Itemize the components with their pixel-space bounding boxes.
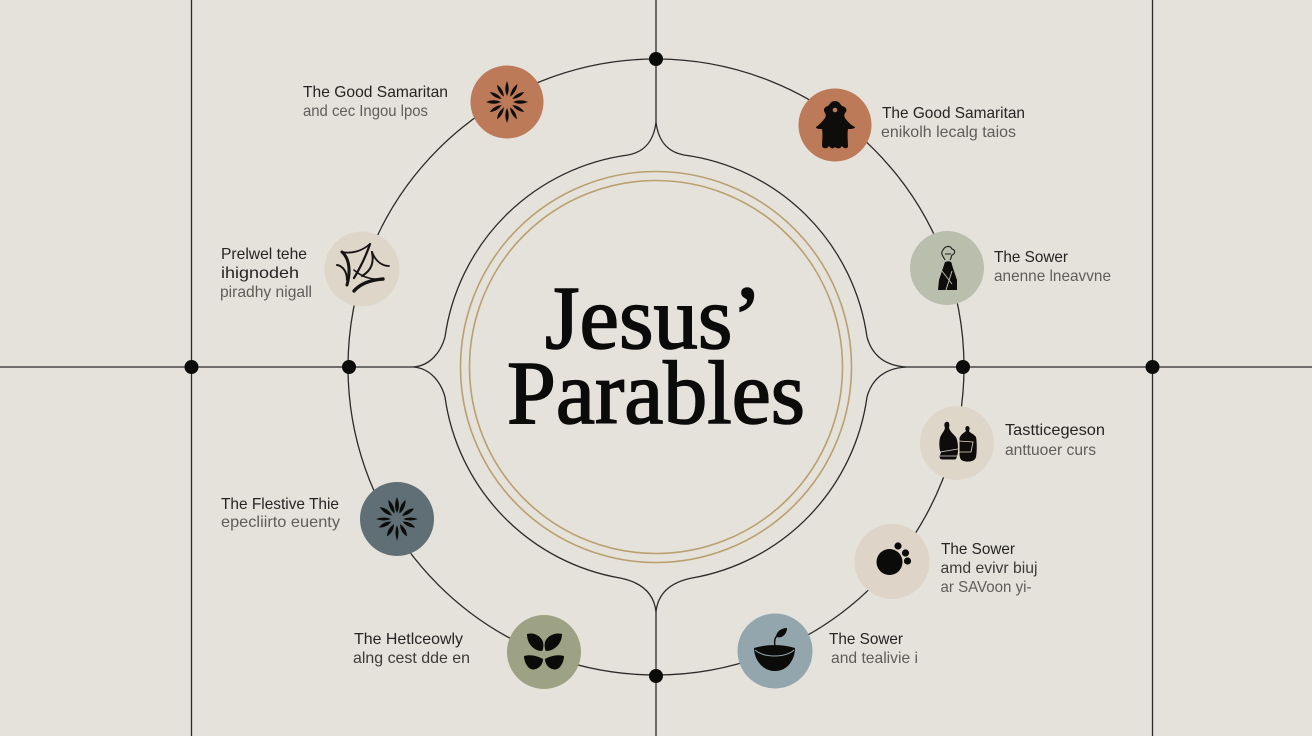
label (220, 246, 312, 301)
icon: robed sower (938, 246, 957, 290)
icon: curved web (337, 244, 389, 291)
label (829, 631, 918, 667)
label: Prelwel tehe (221, 246, 307, 263)
node: top left terracotta (303, 66, 544, 138)
icon: sunburst (486, 81, 528, 123)
label: Tastticegeson (1005, 422, 1105, 439)
label (221, 496, 340, 531)
label: The Sower (941, 541, 1016, 558)
outer ring (348, 59, 964, 675)
node: right sage (910, 231, 1111, 305)
node: lower right beige seeds (854, 524, 1038, 599)
label (303, 84, 448, 120)
label: ar SAVoon yi- (940, 579, 1032, 596)
label: anttuoer curs (1005, 442, 1096, 459)
label: and cec Ingou lpos (303, 103, 428, 120)
label (994, 249, 1111, 285)
icon: bottles (939, 422, 977, 462)
title: Jesus’ (545, 269, 762, 368)
label: The Sower (829, 631, 904, 648)
junction dots (184, 52, 1160, 683)
label: The Hetlceowly (354, 631, 463, 648)
label (940, 541, 1038, 596)
node: upper left beige web (220, 232, 400, 306)
title (507, 269, 805, 443)
icon: bowl and sprout (754, 628, 795, 671)
node: bottom right blue bowl (738, 614, 918, 688)
label (353, 631, 470, 667)
icon: seeds (876, 542, 911, 575)
gold double ring (460, 172, 852, 562)
label: amd evivr biuj (940, 560, 1038, 577)
node: right beige bottles (920, 406, 1105, 480)
label: piradhy nigall (220, 284, 312, 301)
label (1005, 422, 1105, 459)
label: The Flestive Thie (221, 496, 339, 513)
inner cusped ring (413, 122, 907, 612)
label: The Good Samaritan (882, 105, 1025, 122)
title: Parables (507, 344, 805, 443)
node: top right terracotta (798, 88, 1025, 162)
icon: leaves (524, 633, 564, 670)
label: epecliirto euenty (221, 514, 340, 531)
node: bottom left olive leaves (353, 615, 581, 689)
label: and tealivie i (831, 650, 918, 667)
label (881, 105, 1025, 141)
node: lower left slate (221, 482, 434, 556)
label: alng cest dde en (353, 650, 470, 667)
label: The Good Samaritan (303, 84, 448, 101)
label: ihignodeh (221, 265, 299, 282)
icon: figure (816, 101, 855, 148)
label: The Sower (994, 249, 1069, 266)
label: enikolh lecalg taios (881, 124, 1016, 141)
icon: starburst (376, 497, 418, 541)
label: anenne lneavvne (994, 268, 1111, 285)
